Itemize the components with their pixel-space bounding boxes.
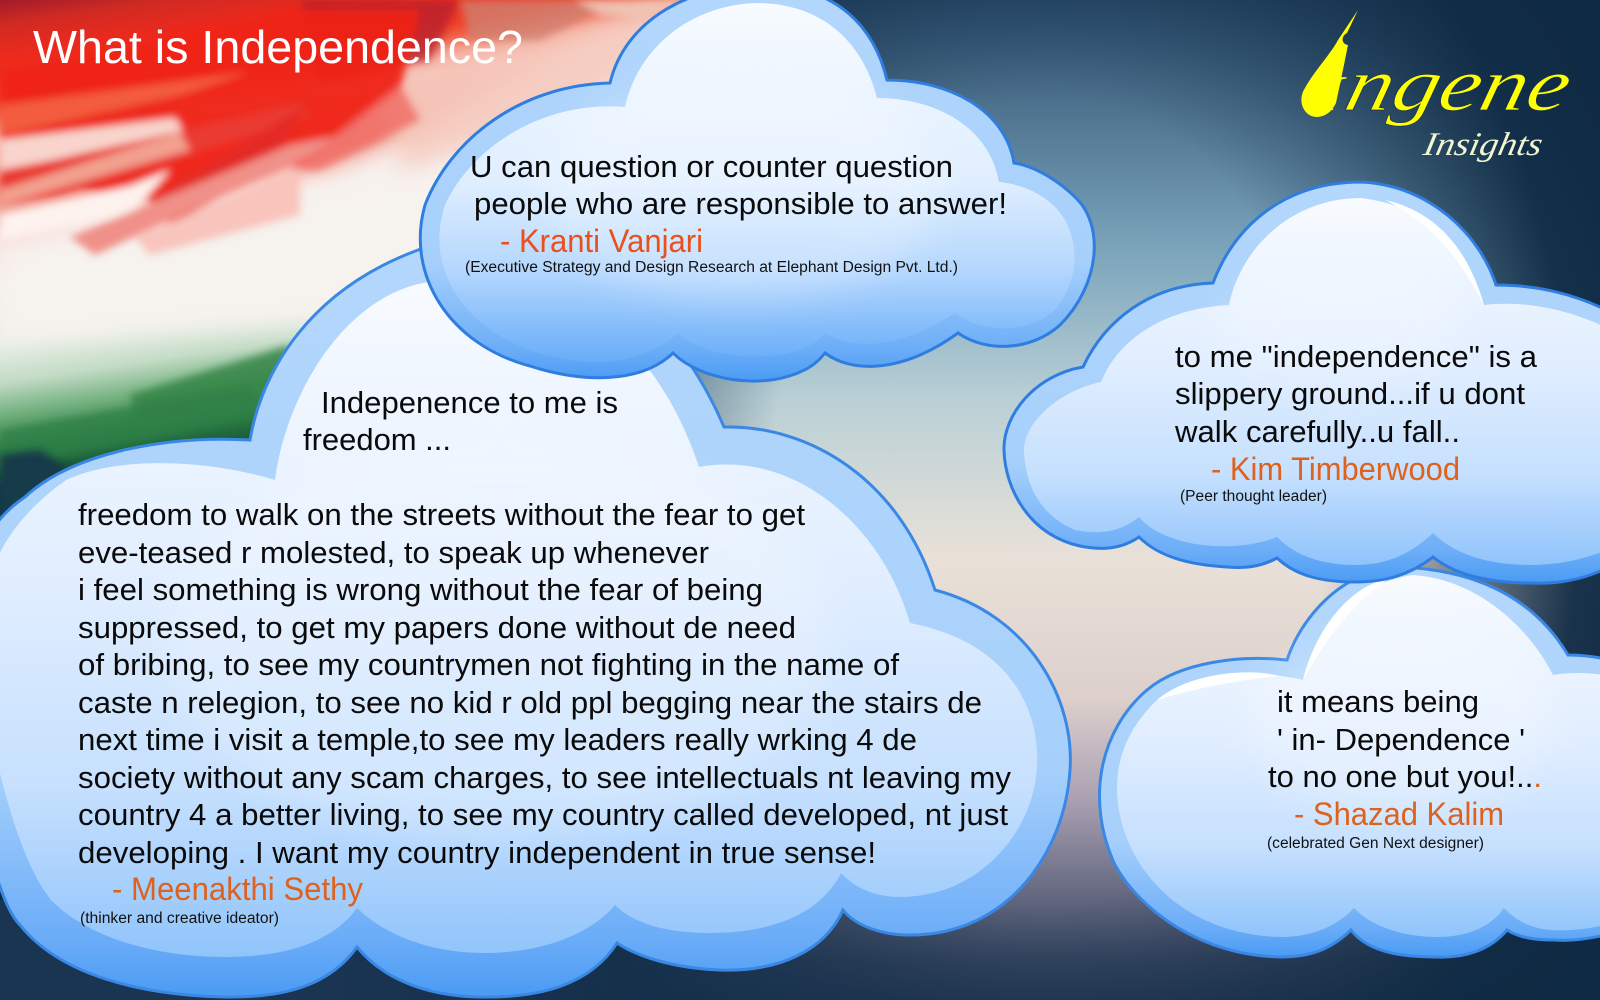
quote text: i feel something is wrong without the fear of being (78, 572, 763, 607)
quote text: next time i visit a temple,to see my leaders really wrking 4 de (78, 722, 917, 757)
quote text: caste n relegion, to see no kid r old ppl begging near the stairs de (78, 685, 982, 720)
cloud shape (1004, 182, 1600, 583)
logo wordmark: I (1316, 66, 1350, 121)
quote text: freedom to walk on the streets without the fear to get (78, 497, 805, 532)
quote text (1174, 339, 1538, 449)
quote text (78, 385, 1011, 870)
attribution name: - Kranti Vanjari (500, 223, 703, 259)
cloud shape (0, 244, 1070, 997)
attribution role: (thinker and creative ideator) (80, 910, 279, 927)
logo wordmark: ngene (1338, 42, 1581, 127)
logo subtitle: Insights (1419, 126, 1546, 163)
attribution name: - Kim Timberwood (1211, 451, 1460, 487)
panel: Kim Timberwood cloud (1004, 182, 1600, 583)
quote text: developing . I want my country independent in true sense! (78, 835, 876, 870)
tricolour flag brush strokes (0, 0, 760, 530)
quote text: to no one but you!... (1268, 759, 1542, 794)
attribution role: (Peer thought leader) (1180, 488, 1327, 505)
panel: Shazad Kalim cloud (1099, 567, 1600, 957)
quote text: freedom ... (303, 422, 451, 457)
logo: Ingene Insights (1301, 10, 1581, 163)
quote text: ' in- Dependence ' (1277, 722, 1525, 757)
cloud shape (420, 0, 1094, 381)
quote text: slippery ground...if u dont (1175, 376, 1525, 411)
quote text: of bribing, to see my countrymen not fighting in the name of (78, 647, 899, 682)
attribution role: (celebrated Gen Next designer) (1267, 835, 1484, 852)
attribution role: (Executive Strategy and Design Research at Elephant Design Pvt. Ltd.) (465, 259, 958, 276)
quote text: U can question or counter question (470, 149, 953, 184)
attribution name: - Shazad Kalim (1294, 796, 1504, 832)
quote text: walk carefully..u fall.. (1174, 414, 1460, 449)
quote text: people who are responsible to answer! (474, 186, 1007, 221)
quote text: eve-teased r molested, to speak up whenever (78, 535, 709, 570)
attribution name: - Meenakthi Sethy (112, 871, 363, 907)
cloud shape (1099, 567, 1600, 957)
quote text: it means being (1277, 684, 1479, 719)
quote text (470, 149, 1007, 221)
panel: Meenakthi Sethy cloud (0, 244, 1070, 997)
quote text: country 4 a better living, to see my country called developed, nt just (78, 797, 1008, 832)
quote text: society without any scam charges, to see intellectuals nt leaving my (78, 760, 1011, 795)
quote text (1268, 684, 1542, 794)
quote text: suppressed, to get my papers done without de need (78, 610, 796, 645)
title: What is Independence? (33, 21, 523, 73)
panel: Kranti Vanjari cloud (420, 0, 1094, 381)
logo drop letter (1301, 10, 1358, 117)
quote text: Indepenence to me is (321, 385, 618, 420)
quote text: to me "independence" is a (1175, 339, 1538, 374)
